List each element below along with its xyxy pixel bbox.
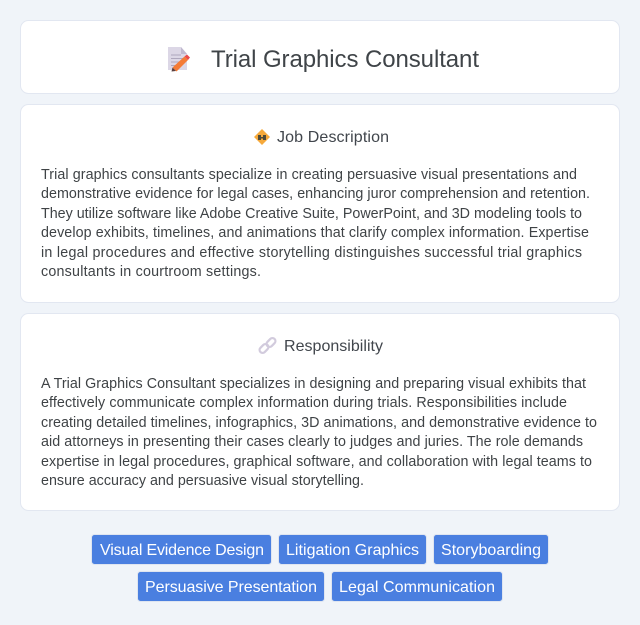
tag: Litigation Graphics [278, 534, 426, 564]
panel: responsibility [20, 314, 620, 510]
text: responsibility body: aid attorneys in presenting their cases clearly to judges and juries. The role demands [41, 434, 583, 450]
tag: Legal Communication [332, 572, 502, 602]
icon: job diamond [254, 129, 270, 145]
text: responsibility body: creating detailed timelines, infographics, 3D animations, and demonstrative evidence to [41, 415, 597, 431]
text: responsibility body: A Trial Graphics Consultant specializes in designing and preparing visual exhibits that [41, 376, 586, 392]
icon: chain link [258, 337, 277, 354]
text: job description body: in legal procedures and effective storytelling distinguishes successful trial graphics [41, 245, 582, 261]
tag: Litigation Graphics: Litigation Graphics [286, 542, 419, 559]
tag: Visual Evidence Design [92, 534, 272, 564]
text: job description body: demonstrative evidence for legal cases, enhancing juror comprehension and retention. [41, 186, 590, 202]
tag: Storyboarding: Storyboarding [441, 542, 541, 559]
heading: responsibility: Responsibility [284, 338, 383, 355]
tag: Persuasive Presentation [138, 572, 324, 602]
text: job description body: consultants in courtroom settings. [41, 264, 261, 280]
text: responsibility body [41, 376, 597, 489]
panel: job description [20, 104, 620, 302]
tag: Legal Communication: Legal Communication [339, 579, 495, 596]
tag: Storyboarding [434, 534, 548, 564]
tag: Persuasive Presentation: Persuasive Presentation [145, 579, 317, 596]
text: job description body: They utilize software like Adobe Creative Suite, PowerPoint, and 3D modeling tools to [41, 206, 582, 222]
heading: job description: Job Description [277, 129, 389, 146]
tag: Visual Evidence Design: Visual Evidence Design [100, 542, 264, 559]
text: job description body: Trial graphics consultants specialize in creating persuasive visual presentations and [41, 167, 577, 183]
text: responsibility body: ensure accuracy and persuasive visual storytelling. [41, 473, 364, 489]
text: job description body [41, 167, 590, 280]
panel: title card [20, 20, 620, 94]
text: responsibility body: expertise in legal procedures, graphical software, and collaboration with legal teams to [41, 454, 592, 470]
icon: document with pencil [168, 47, 190, 72]
text: responsibility body: effectively communicate complex information during trials. Responsibilities include [41, 395, 567, 411]
title: Trial Graphics Consultant [211, 46, 479, 73]
text: job description body: develop exhibits, timelines, and animations that clarify complex information. Expertise [41, 225, 589, 241]
